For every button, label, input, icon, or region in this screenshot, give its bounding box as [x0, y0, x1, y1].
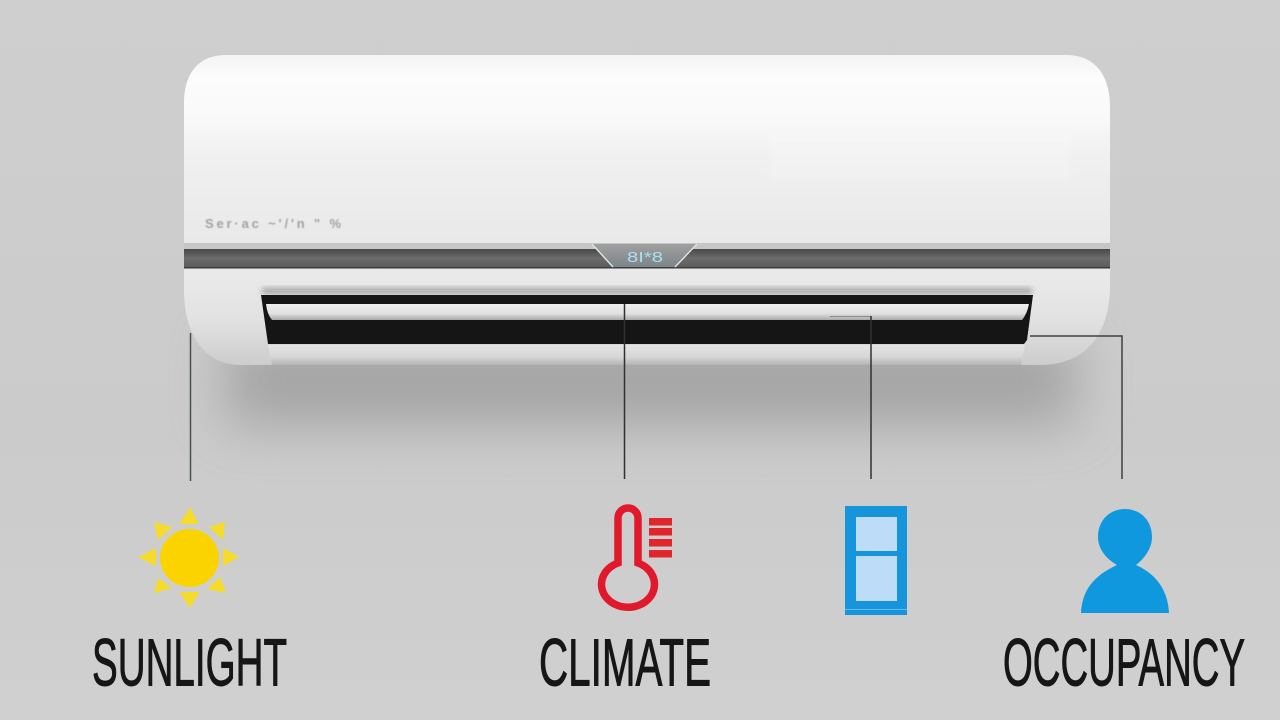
brand mark: Ser·ac ~'/'n " % — [205, 216, 341, 231]
temperature scale — [649, 518, 672, 558]
icon: window — [845, 506, 907, 615]
gloss highlight — [770, 135, 1070, 180]
leader line: climate — [624, 304, 626, 479]
label: sunlight: SUNLIGHT — [92, 626, 287, 700]
top band shadow — [184, 243, 1110, 249]
unit body — [184, 55, 1110, 365]
lower vane — [268, 345, 1025, 365]
upper vane — [266, 304, 1029, 320]
display readout: 8I*8 — [627, 249, 663, 266]
air conditioner unit — [184, 55, 1110, 365]
dark front band — [184, 249, 1110, 268]
air outlet recess — [261, 288, 1033, 365]
leader line: occupancy — [1030, 336, 1122, 479]
display panel — [592, 244, 697, 267]
leader line: sunlight — [190, 333, 192, 481]
icon: thermometer — [601, 508, 672, 607]
icon: person — [1081, 509, 1169, 613]
wall shadow below unit — [225, 335, 1075, 425]
label: climate: CLIMATE — [539, 626, 711, 700]
icon: sun — [138, 507, 239, 608]
leader line: window — [830, 316, 871, 479]
